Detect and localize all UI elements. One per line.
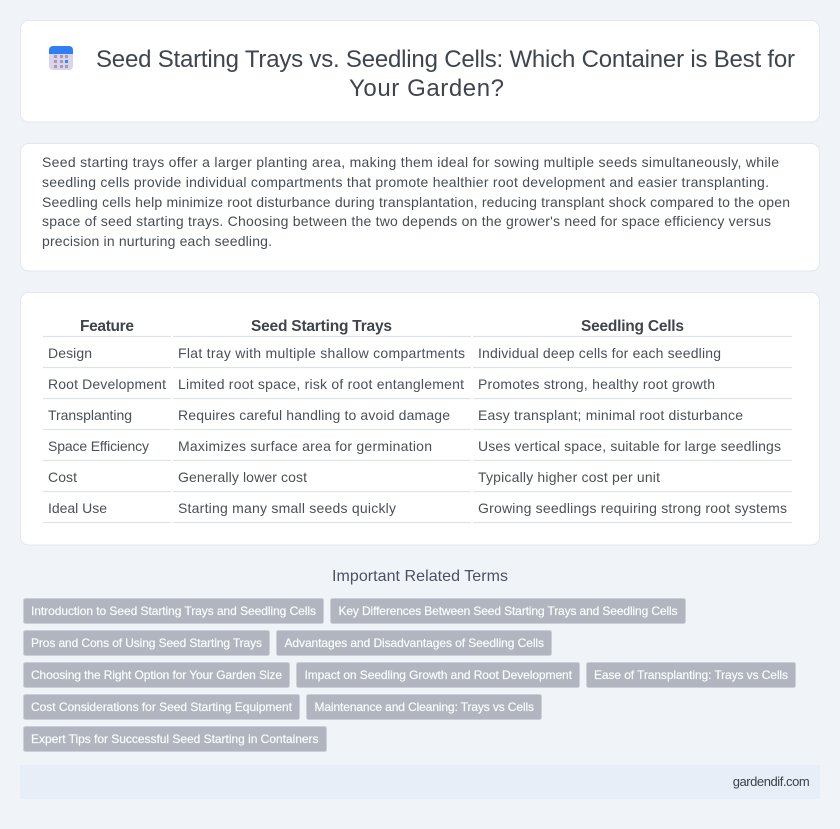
table row: design: Flat tray with multiple shallow compartments (178, 345, 465, 361)
table header: Seedling Cells (581, 318, 684, 335)
table header: Seed Starting Trays (251, 318, 392, 335)
table row: space efficiency: Maximizes surface area for germination (178, 438, 432, 454)
tag: Cost Considerations for Seed Starting Equipment (31, 700, 293, 714)
panel: comparison table (20, 292, 820, 545)
tag: Impact on Seedling Growth and Root Development (304, 668, 573, 682)
text block: intro: space of seed starting trays. Choosing between the two depends on the grower's need for space efficiency versus (42, 213, 771, 229)
table row: cost: Cost (48, 469, 77, 485)
text block: intro (42, 154, 790, 249)
tag: Advantages and Disadvantages of Seedling Cells (284, 636, 544, 650)
tag (24, 630, 270, 656)
table row: space efficiency (48, 438, 781, 454)
table row: root development: Promotes strong, healthy root growth (478, 376, 715, 392)
tag (24, 662, 290, 688)
table row: cost: Generally lower cost (178, 469, 307, 485)
table row: design: Individual deep cells for each seedling (478, 345, 721, 361)
tag (24, 598, 324, 624)
text block: intro: seedling cells provide individual compartments that promote healthier root development and easier transplanting. (42, 174, 769, 190)
table row: space efficiency: Space Efficiency (48, 438, 149, 454)
table header (80, 318, 684, 335)
table header: Feature (80, 318, 134, 335)
tag (306, 694, 542, 720)
table row: design (48, 345, 721, 361)
tag (296, 662, 580, 688)
tag: Key Differences Between Seed Starting Trays and Seedling Cells (338, 604, 678, 618)
table row: transplanting: Easy transplant; minimal root disturbance (478, 407, 743, 423)
tag: Expert Tips for Successful Seed Starting in Containers (31, 732, 318, 746)
icon: calendar tray (49, 46, 73, 70)
tag: Pros and Cons of Using Seed Starting Trays (31, 636, 262, 650)
text block: intro: Seed starting trays offer a larger planting area, making them ideal for sowing multiple seeds simultaneously, while (42, 154, 779, 170)
tag: Ease of Transplanting: Trays vs Cells (594, 668, 788, 682)
table row: ideal use: Growing seedlings requiring strong root systems (478, 500, 787, 516)
text block: intro: precision in nurturing each seedling. (42, 233, 272, 249)
table row: transplanting (48, 407, 743, 423)
panel: intro paragraph (20, 144, 820, 271)
table row: space efficiency: Uses vertical space, suitable for large seedlings (478, 438, 781, 454)
tag (24, 694, 300, 720)
table row: cost: Typically higher cost per unit (478, 469, 660, 485)
tag list: related terms (24, 598, 796, 752)
tag (276, 630, 552, 656)
table row: ideal use: Starting many small seeds quickly (178, 500, 396, 516)
heading: related terms: Important Related Terms (332, 568, 508, 585)
tag (330, 598, 686, 624)
tag: Introduction to Seed Starting Trays and Seedling Cells (31, 604, 316, 618)
table row: transplanting: Transplanting (48, 407, 132, 423)
table row: root development: Limited root space, risk of root entanglement (178, 376, 464, 392)
tag (586, 662, 796, 688)
panel: title header (20, 20, 820, 122)
table row: root development (48, 376, 715, 392)
tag: Maintenance and Cleaning: Trays vs Cells (314, 700, 534, 714)
table row: ideal use (48, 500, 787, 516)
table row: design: Design (48, 345, 92, 361)
table row: ideal use: Ideal Use (48, 500, 107, 516)
tag: Choosing the Right Option for Your Garden Size (31, 668, 282, 682)
tag (24, 726, 326, 752)
table row: transplanting: Requires careful handling to avoid damage (178, 407, 450, 423)
footer source text: gardendif.com (733, 774, 810, 789)
title (96, 46, 795, 102)
table row: root development: Root Development (48, 376, 166, 392)
footer bar (20, 765, 820, 799)
title: Seed Starting Trays vs. Seedling Cells: Which Container is Best for (96, 46, 795, 73)
table row: cost (48, 469, 660, 485)
text block: intro: Seedling cells help minimize root disturbance during transplantation, reducing transplant shock compared to the open (42, 194, 790, 210)
title: Your Garden? (349, 75, 504, 102)
